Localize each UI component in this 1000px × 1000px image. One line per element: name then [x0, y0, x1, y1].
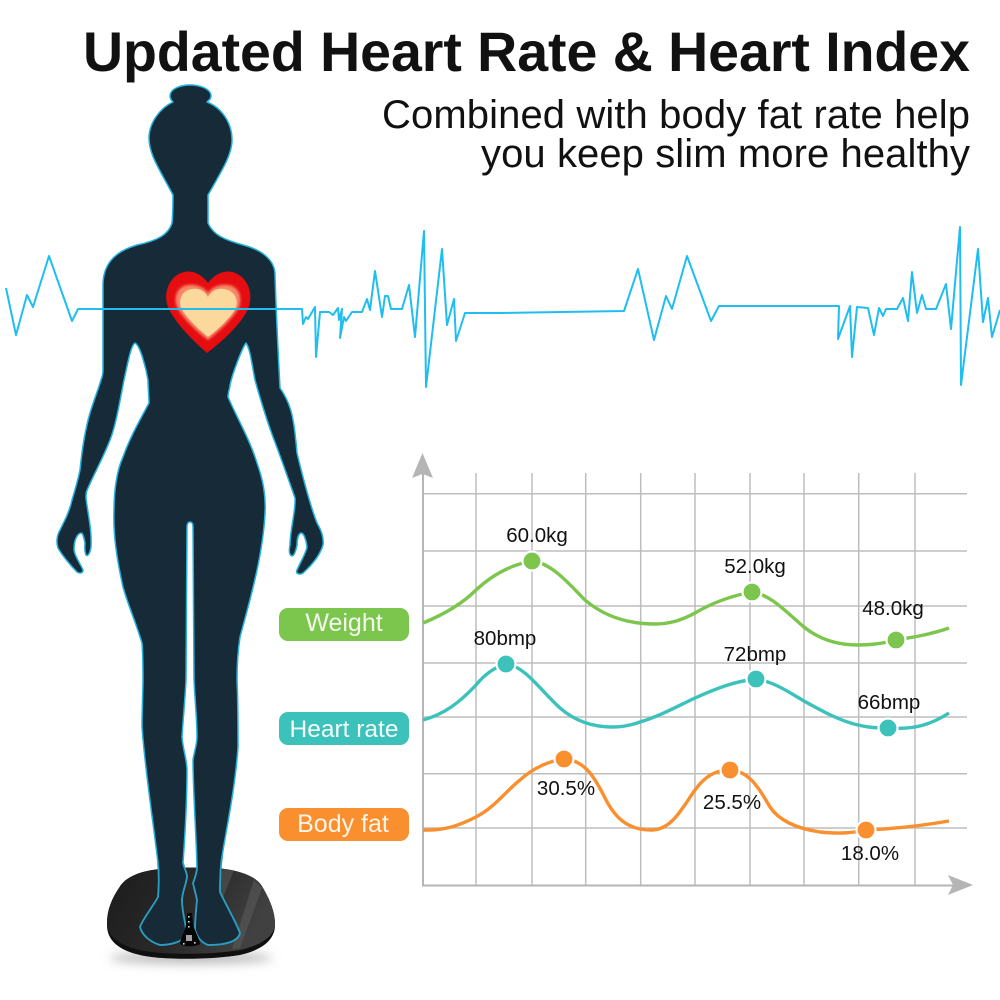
subtitle: you keep slim more healthy	[481, 132, 970, 176]
legend pill: heart rate: Heart rate	[290, 716, 398, 743]
ECG line	[6, 227, 1000, 387]
value labels: 80bmp	[474, 627, 536, 650]
value labels: 72bmp	[724, 643, 786, 666]
scale display	[180, 913, 200, 946]
chart: weight, heart rate and body fat trends	[412, 453, 973, 895]
axes	[412, 453, 973, 895]
curve: weight	[423, 561, 949, 645]
curve: body fat	[423, 759, 949, 833]
curve: heart rate	[423, 664, 949, 728]
value labels: 25.5%	[703, 791, 761, 814]
feet outline	[140, 857, 240, 945]
legend pill: body fat: Body fat	[297, 810, 389, 838]
value labels: 60.0kg	[506, 524, 568, 547]
body scale	[107, 868, 275, 964]
woman silhouette	[57, 85, 323, 945]
value labels: 66bmp	[858, 691, 920, 714]
subtitle: Combined with body fat rate help	[382, 93, 970, 137]
icon: heart	[166, 272, 250, 353]
data points	[496, 552, 906, 840]
value labels: 30.5%	[537, 777, 595, 800]
legend pill: heart rate	[279, 712, 409, 745]
legend pill: body fat	[279, 808, 409, 841]
value labels	[474, 524, 924, 865]
value labels: 52.0kg	[724, 555, 786, 578]
title: Updated Heart Rate & Heart Index	[83, 21, 970, 83]
chart grid	[423, 473, 967, 885]
legend pill: weight: Weight	[305, 609, 383, 637]
value labels: 18.0%	[841, 842, 899, 865]
value labels: 48.0kg	[862, 597, 924, 620]
subtitle	[382, 93, 970, 176]
legend pill: weight	[279, 608, 409, 641]
